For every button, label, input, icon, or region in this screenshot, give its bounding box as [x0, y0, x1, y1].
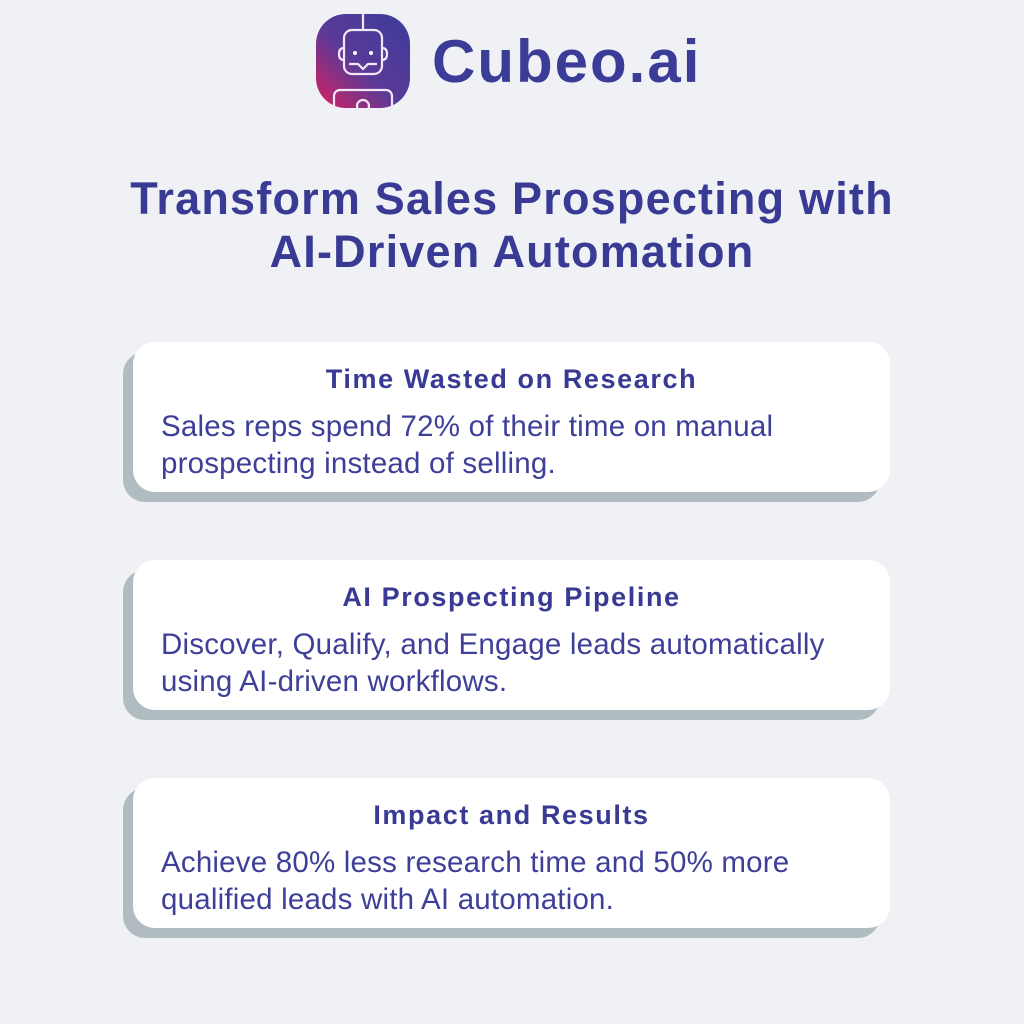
heading: Impact and Results [373, 800, 650, 830]
text block [161, 410, 773, 480]
title: AI-Driven Automation [270, 226, 754, 277]
title: Transform Sales Prospecting with [130, 173, 894, 224]
text block [161, 846, 789, 916]
heading: AI Prospecting Pipeline [342, 582, 681, 612]
heading: Time Wasted on Research [326, 364, 697, 394]
panel: impact [133, 778, 890, 928]
panel: time wasted [133, 342, 890, 492]
logo [316, 14, 701, 110]
text block: qualified leads with AI automation. [161, 883, 614, 916]
brand name: Cubeo.ai [432, 28, 701, 95]
text block: Achieve 80% less research time and 50% more [161, 846, 789, 879]
text block: Discover, Qualify, and Engage leads automatically [161, 628, 825, 661]
icon: robot [316, 14, 410, 110]
text block: prospecting instead of selling. [161, 447, 556, 480]
text block [161, 628, 825, 698]
text block: using AI-driven workflows. [161, 665, 507, 698]
panel: pipeline [133, 560, 890, 710]
title [130, 173, 894, 277]
text block: Sales reps spend 72% of their time on manual [161, 410, 773, 443]
